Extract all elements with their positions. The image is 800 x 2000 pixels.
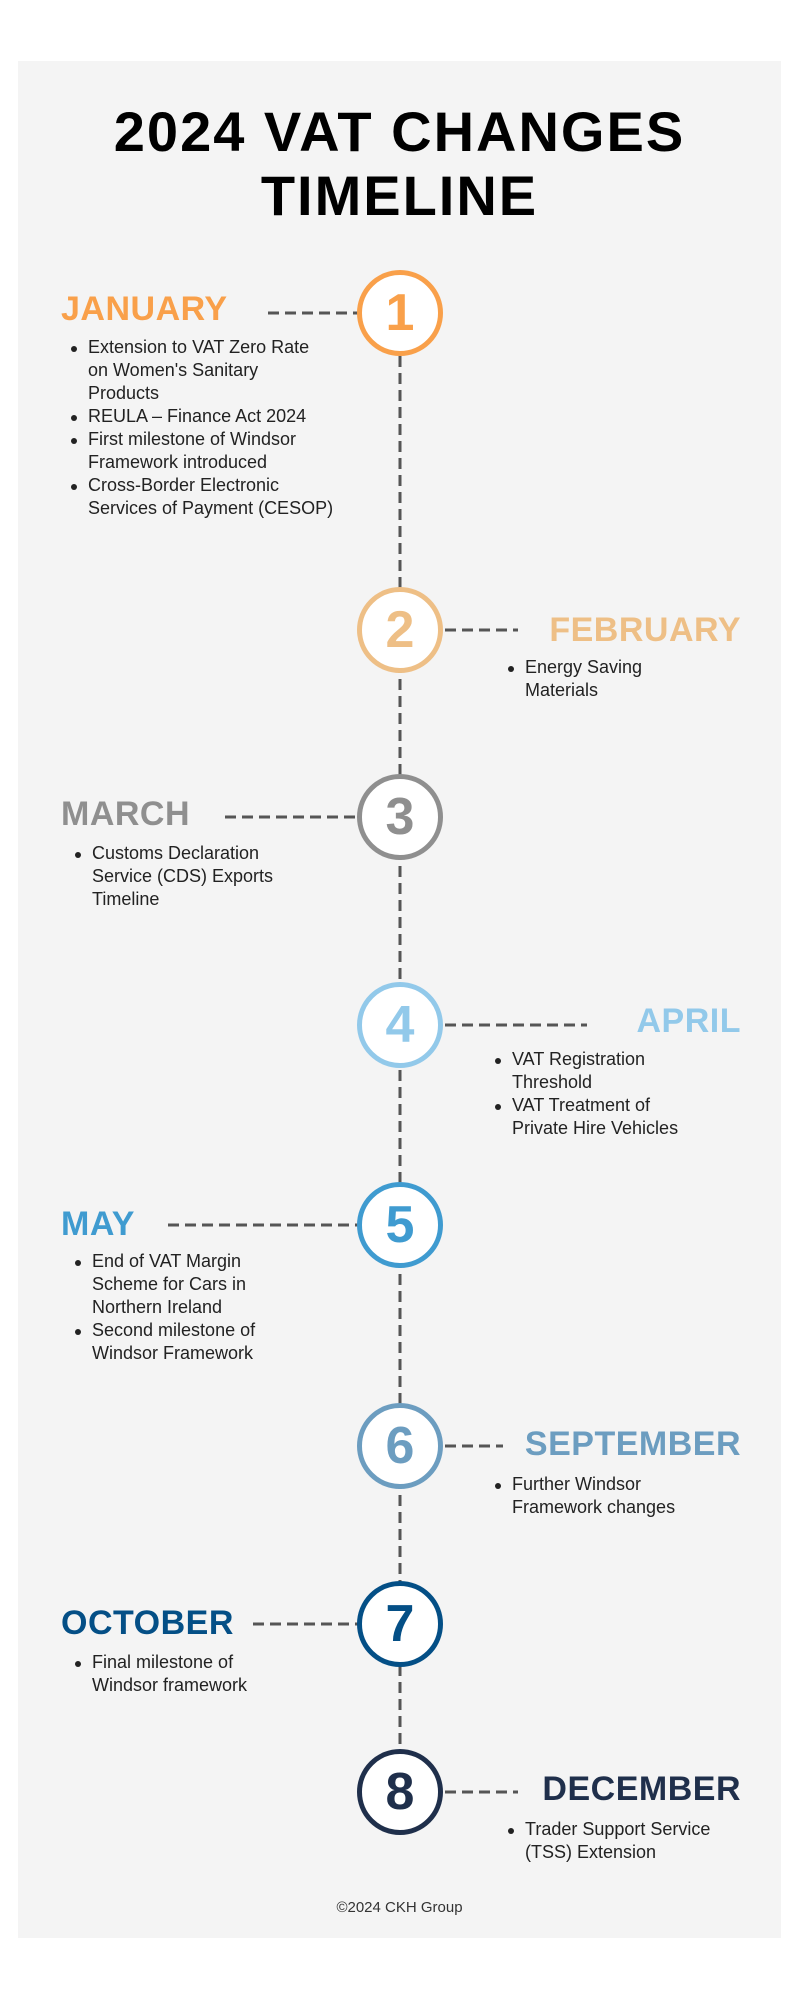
bullets: April: VAT Registration Threshold [512,1049,645,1092]
heading: January: JANUARY [61,290,228,328]
bullets: March: Customs Declaration Service (CDS) Exports Timeline [92,843,273,909]
circle 6: 6 [386,1417,414,1475]
milestone 2: February [357,587,741,700]
title [114,100,685,227]
bullets: May: End of VAT Margin Scheme for Cars in Northern Ireland [92,1251,246,1317]
bullets: October: Final milestone of Windsor framework [92,1652,247,1695]
circle 3 [357,774,443,860]
milestone 1: January [61,270,443,518]
heading: December: DECEMBER [542,1770,741,1808]
circle 1 [357,270,443,356]
circle 1: 1 [386,284,414,342]
circle 7 [357,1581,443,1667]
title: 2024 VAT CHANGES [114,100,685,163]
bullets: February: Energy Saving Materials [525,657,642,700]
bullets: January: Products [88,383,159,403]
bullets: April [495,1049,678,1138]
heading: October: OCTOBER [61,1604,234,1642]
heading: March: MARCH [61,795,190,833]
circle 5: 5 [386,1196,414,1254]
milestone 4: April [357,982,741,1138]
bullets: January: REULA – Finance Act 2024 [88,406,306,426]
bullets: January: Services of Payment (CESOP) [88,498,333,518]
bullets: September: Further Windsor Framework changes [512,1474,675,1517]
milestone 6: September [357,1403,741,1517]
circle 2 [357,587,443,673]
heading: February: FEBRUARY [549,611,741,649]
title: TIMELINE [261,164,538,227]
circle 6 [357,1403,443,1489]
circle 3: 3 [386,788,414,846]
circle 4: 4 [386,996,414,1054]
circle 2: 2 [386,601,414,659]
bullets: May [75,1251,256,1363]
circle 8: 8 [386,1763,414,1821]
bullets: December: Trader Support Service (TSS) Extension [525,1819,710,1862]
bullets: January: Framework introduced [88,452,267,472]
milestone 8: December [357,1749,741,1862]
bullets: May: Second milestone of Windsor Framework [92,1320,255,1363]
footer: ©2024 CKH Group [336,1899,463,1916]
bullets: January: Cross-Border Electronic [88,475,279,495]
circle 5 [357,1182,443,1268]
bullets: January [71,337,333,518]
circle 4 [357,982,443,1068]
bullets: April: VAT Treatment of Private Hire Vehicles [512,1095,678,1138]
bullets: January: Extension to VAT Zero Rate [88,337,309,357]
heading: April: APRIL [636,1002,741,1040]
circle 8 [357,1749,443,1835]
milestone 5: May [61,1182,443,1363]
bullets: January: First milestone of Windsor [88,429,296,449]
bullets: January: on Women's Sanitary [88,360,258,380]
heading: May: MAY [61,1205,135,1243]
milestone 7: October [61,1581,443,1695]
circle 7: 7 [386,1595,414,1653]
milestone 3: March [61,774,443,909]
heading: September: SEPTEMBER [525,1425,741,1463]
